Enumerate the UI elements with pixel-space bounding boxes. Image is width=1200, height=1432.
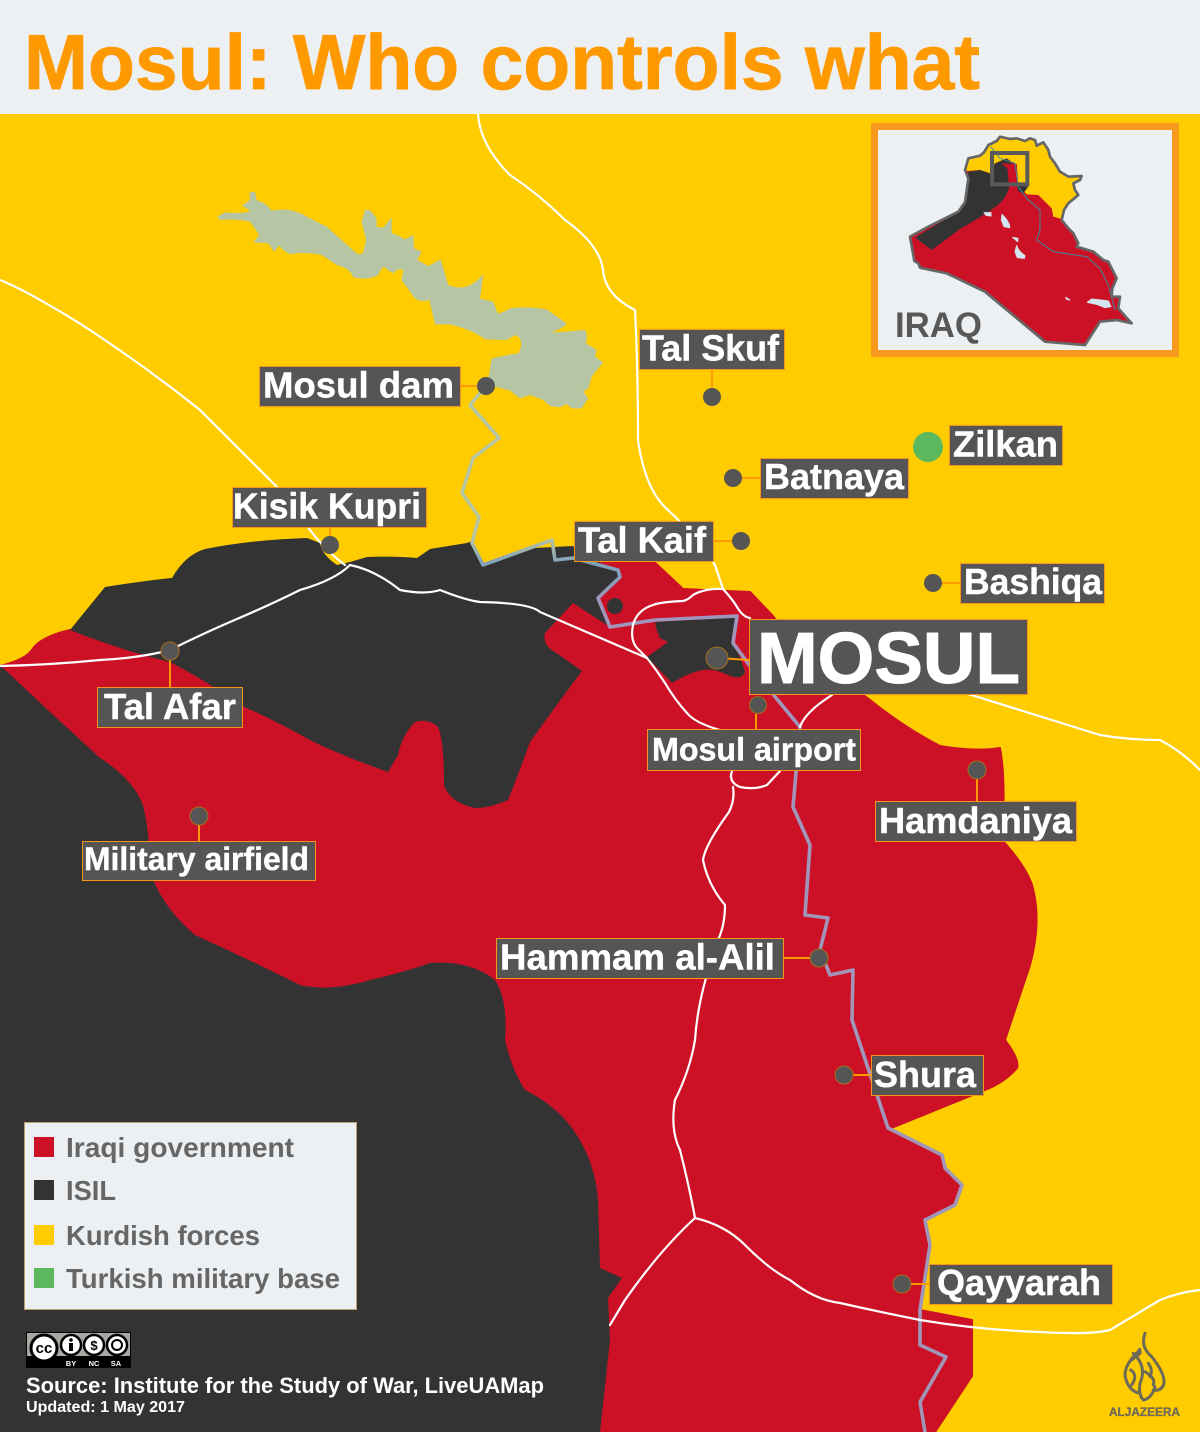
label: Tal Skuf	[640, 328, 784, 406]
label: Bashiqa: Bashiqa	[964, 561, 1103, 602]
label: Shura: Shura	[874, 1054, 977, 1095]
label: Military airfield: Military airfield	[84, 841, 309, 877]
icon: creative commons badge	[26, 1332, 131, 1368]
title: Mosul: Who controls what	[24, 18, 980, 106]
legend: Kurdish forces: Kurdish forces	[66, 1220, 260, 1251]
legend: ISIL: ISIL	[66, 1175, 116, 1206]
label: Qayyarah: Qayyarah	[937, 1262, 1101, 1303]
inset: Kurdish territory	[965, 137, 1082, 219]
label: MOSUL: MOSUL	[757, 618, 1020, 699]
label: Mosul dam: Mosul dam	[263, 364, 454, 406]
icon: creative commons badge: BY	[66, 1359, 76, 1368]
label: Tal Afar: Tal Afar	[104, 686, 236, 727]
label: Kisik Kupri	[232, 486, 426, 554]
icon: Al Jazeera logo	[1109, 1333, 1180, 1419]
label: Shura	[835, 1054, 984, 1096]
territory: ISIL north-west pocket	[70, 538, 621, 808]
inset: ISIL territory	[915, 158, 1014, 250]
label: Hamdaniya: Hamdaniya	[879, 800, 1073, 841]
inset: Iraqi government pocket	[1002, 163, 1018, 186]
legend: Turkish military base: Turkish military base	[66, 1263, 340, 1294]
inset: locator square	[992, 153, 1027, 184]
territory: ISIL Mosul city	[647, 617, 745, 683]
logo wordmark: ALJAZEERA	[1109, 1405, 1180, 1419]
icon: creative commons badge: NC	[89, 1359, 100, 1368]
river Tigris	[462, 386, 962, 1432]
label: Tal Afar	[98, 642, 242, 728]
legend: Iraqi government: Iraqi government	[66, 1132, 294, 1163]
label: Zilkan Turkish base: Zilkan	[953, 424, 1058, 464]
label: Batnaya: Batnaya	[764, 456, 905, 497]
label: Mosul airport	[648, 696, 860, 770]
label: Tal Kaif: Tal Kaif	[578, 520, 707, 560]
inset: river	[991, 147, 1115, 310]
icon: creative commons badge: cc	[36, 1340, 52, 1357]
inset map panel: Iraq	[874, 126, 1176, 354]
legend: ISIL	[34, 1175, 116, 1206]
territory: ISIL south-west	[0, 665, 622, 1432]
inset: IRAQ label: IRAQ	[895, 306, 982, 345]
legend panel	[24, 1122, 356, 1310]
title band	[0, 0, 1200, 114]
source line: Source: Institute for the Study of War, LiveUAMap	[26, 1373, 544, 1398]
label: Hamdaniya	[876, 761, 1076, 842]
label: Kisik Kupri: Kisik Kupri	[233, 486, 421, 526]
territory: ISIL small pocket	[607, 598, 623, 614]
icon: creative commons badge: $	[90, 1338, 98, 1353]
Mosul lake	[217, 192, 603, 408]
updated date: Updated: 1 May 2017	[26, 1399, 185, 1416]
territory: Iraqi government	[0, 558, 1037, 1432]
inset: Iraq red territory	[910, 137, 1132, 345]
inset: country outline	[910, 137, 1132, 345]
inset: lakes	[984, 213, 1111, 308]
label: Zilkan Turkish base	[913, 424, 1062, 466]
label: Mosul airport: Mosul airport	[652, 732, 856, 768]
label: Tal Skuf: Tal Skuf	[642, 328, 780, 368]
icon: creative commons badge: SA	[111, 1359, 122, 1368]
label: Military airfield	[82, 807, 316, 880]
label: Hammam al-Alil: Hammam al-Alil	[500, 936, 775, 978]
